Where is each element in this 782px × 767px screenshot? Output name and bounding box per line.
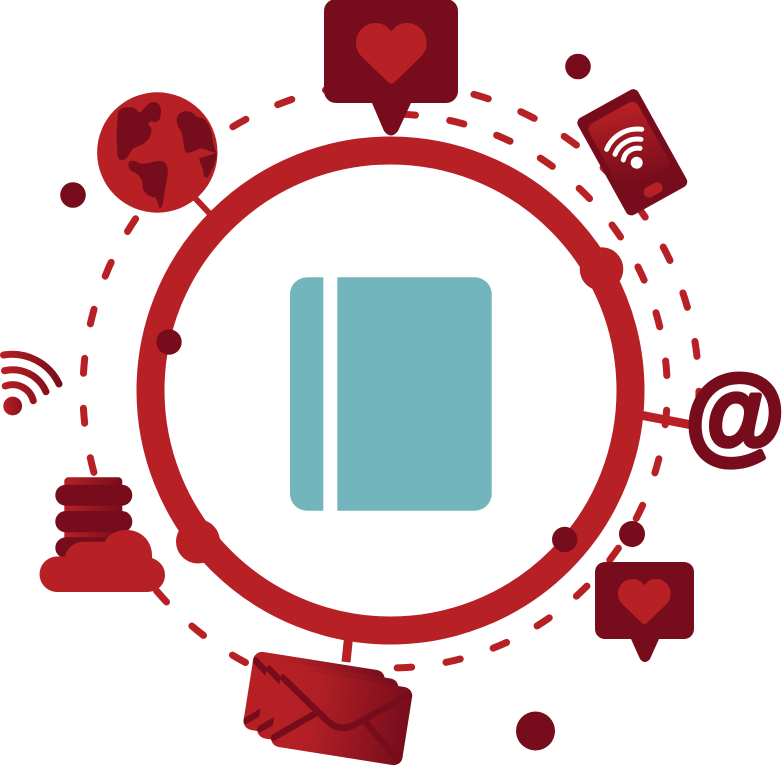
icon: wifi signal <box>3 354 59 415</box>
book <box>290 277 492 511</box>
inner dashed orbit <box>397 114 667 668</box>
icon: database stack with cloud <box>40 477 165 592</box>
middle envelope <box>257 666 398 740</box>
icon: globe <box>97 92 218 213</box>
back envelope <box>244 652 384 731</box>
front envelope <box>270 668 413 766</box>
icon: at sign: @ <box>685 354 782 473</box>
connector lines <box>195 198 692 662</box>
icon: stack of envelopes <box>242 651 413 766</box>
main ring <box>150 150 630 630</box>
icon: top speech bubble with heart <box>324 0 458 136</box>
floating dots <box>60 54 645 750</box>
outer dashed orbit <box>83 83 699 663</box>
ring nodes <box>156 247 623 563</box>
icon: lower speech bubble with heart <box>595 562 694 662</box>
icon: smartphone with wifi <box>575 87 689 218</box>
